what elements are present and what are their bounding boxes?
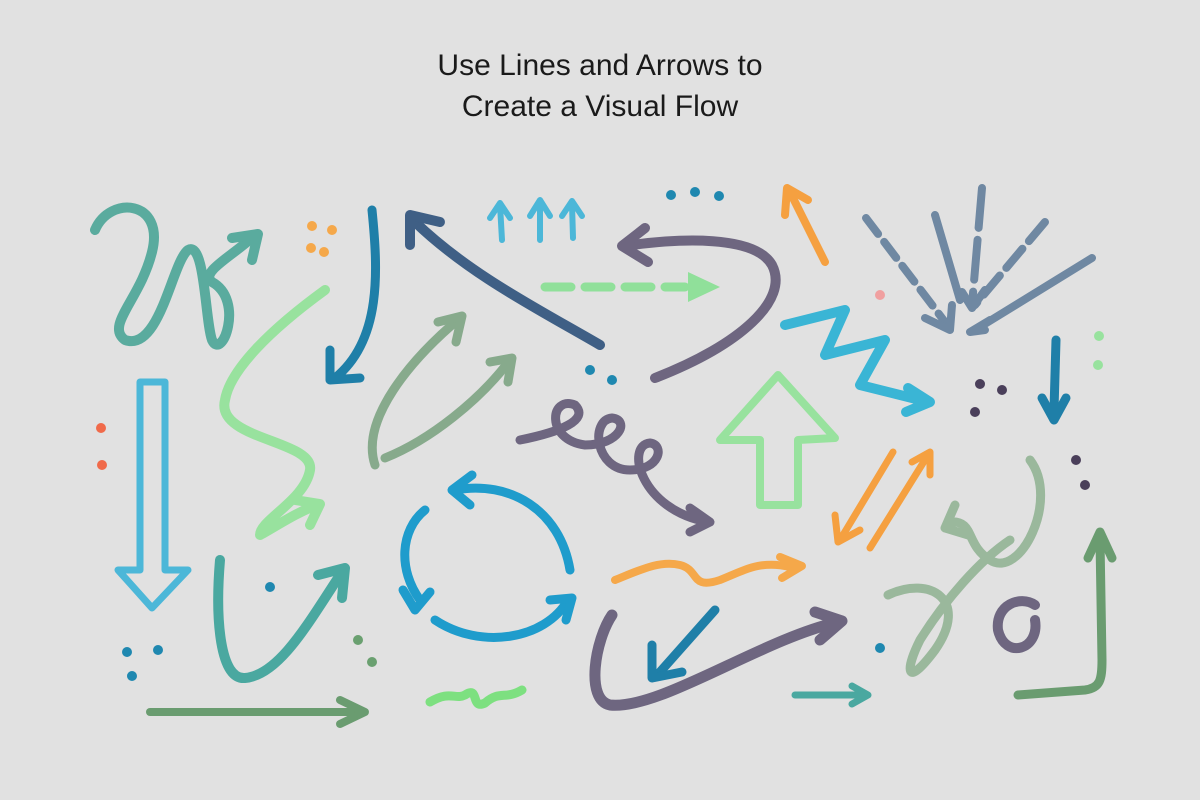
title: Create a Visual Flow bbox=[462, 90, 738, 123]
arrow: green L bbox=[1018, 532, 1112, 695]
arrows: orange double bbox=[835, 452, 930, 548]
arrow: purple swoosh bbox=[595, 612, 842, 705]
arrow: sage loop right bbox=[945, 460, 1041, 563]
arrow: purple curve bbox=[622, 228, 776, 378]
arrow: orange diagonal bbox=[785, 188, 825, 262]
arrow: purple loops bbox=[520, 404, 710, 532]
arrows: blue circle bbox=[403, 475, 572, 637]
arrow: teal U bbox=[218, 560, 345, 678]
arrow: sage loop bottom right bbox=[888, 540, 1010, 672]
arrow: blue down curve bbox=[330, 210, 376, 380]
title bbox=[437, 49, 763, 123]
arrow: green outline up bbox=[720, 375, 835, 505]
arrow: dark blue diagonal bbox=[652, 610, 715, 678]
dots: misc bbox=[96, 290, 1104, 681]
arrow: green bottom bbox=[150, 700, 365, 724]
dots: orange bbox=[306, 221, 337, 257]
arrow: green squiggle bbox=[430, 690, 522, 704]
arrow: dark blue small down bbox=[1042, 340, 1066, 420]
arrow: sage up diagonal bbox=[372, 316, 512, 465]
arrow: green dashed bbox=[545, 272, 720, 302]
title: Use Lines and Arrows to bbox=[437, 49, 763, 82]
arrow: purple circle bbox=[998, 601, 1035, 648]
arrows: slate converging bbox=[866, 188, 1092, 332]
arrow: teal small bbox=[795, 686, 868, 704]
arrow: teal loops bbox=[95, 208, 258, 345]
arrows: small light blue up bbox=[490, 200, 582, 240]
arrow: light blue outline down bbox=[118, 382, 188, 608]
arrow: navy swoosh bbox=[410, 215, 600, 345]
arrow: orange wave bbox=[615, 557, 802, 583]
arrow: light green zigzag bbox=[224, 290, 325, 535]
arrow: blue zigzag bbox=[785, 310, 930, 412]
dots: teal top bbox=[585, 187, 724, 385]
